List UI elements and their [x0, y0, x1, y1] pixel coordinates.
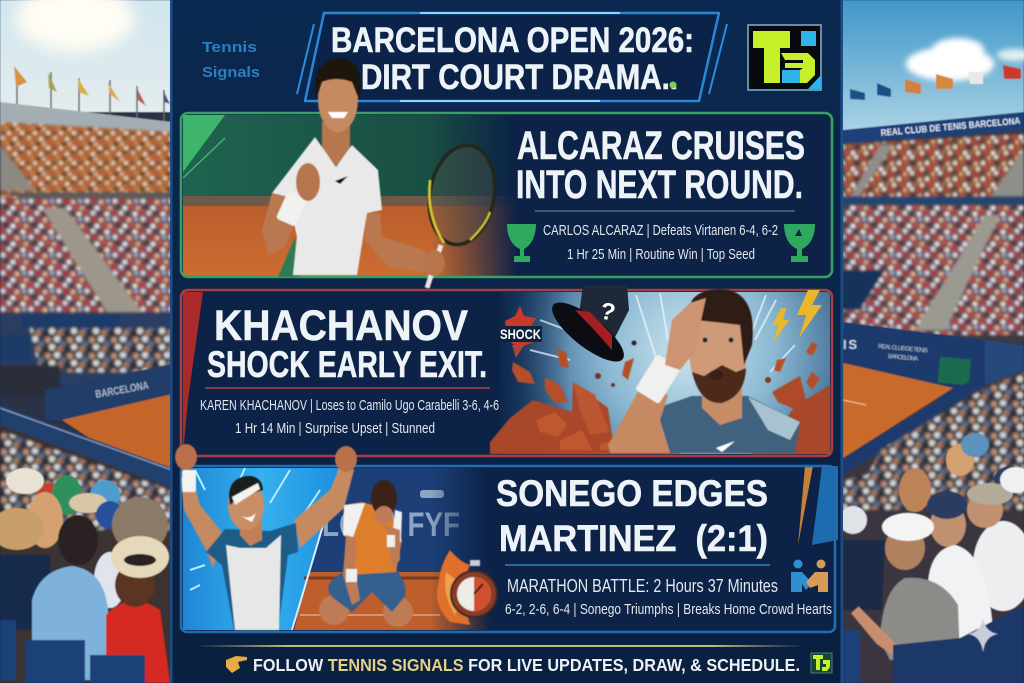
icon: trophy left	[507, 224, 536, 262]
stats line 2: 1 Hr 14 Min | Surprise Upset | Stunned	[235, 420, 435, 437]
title line 2: DIRT COURT DRAMA..	[361, 58, 678, 97]
left lower crowd	[0, 425, 172, 683]
icon: pointing hand	[226, 656, 247, 673]
right court board	[843, 322, 1024, 400]
panel: left stadium photo	[0, 0, 172, 683]
stats line 2: 1 Hr 25 Min | Routine Win | Top Seed	[567, 246, 755, 263]
icon: falling top hat	[544, 285, 632, 371]
icon: trophy right	[784, 224, 815, 262]
shock backdrop	[490, 292, 830, 454]
left Barcelona banner: BARCELONA	[94, 380, 150, 401]
stats line 2: 6-2, 2-6, 6-4 | Sonego Triumphs | Breaks Home Crowd Hearts	[505, 601, 832, 618]
divider: footer rule	[195, 645, 805, 647]
headline: SONEGO EDGES	[496, 473, 768, 514]
headline: ALCARAZ CRUISES	[517, 124, 805, 168]
panel: Sonego	[175, 444, 838, 632]
icon: handshake	[791, 560, 828, 592]
icon: racket	[422, 140, 502, 288]
logo small	[811, 653, 832, 673]
panel: central column	[170, 0, 843, 683]
rubble	[490, 340, 830, 454]
panel: Alcaraz	[181, 113, 832, 277]
headline: KHACHANOV	[214, 302, 468, 350]
headline line 2: MARTINEZ (2:1)	[499, 518, 768, 559]
left Barcelona banner	[45, 364, 172, 420]
illustration: stopwatch with flames	[437, 550, 497, 625]
headline line 2: SHOCK EARLY EXIT.	[207, 344, 487, 385]
left sky	[0, 0, 172, 112]
left flags	[14, 66, 170, 122]
title line 1: BARCELONA OPEN 2026:	[331, 21, 694, 60]
stats line 1: CARLOS ALCARAZ | Defeats Virtanen 6-4, 6-2	[543, 222, 778, 239]
panel: Khachanov	[181, 285, 832, 456]
headline line 2: INTO NEXT ROUND.	[516, 163, 803, 207]
icon: lightning bolts	[772, 290, 822, 343]
left clay court	[62, 394, 172, 468]
right flags	[850, 65, 1021, 100]
stats line 1: MARATHON BATTLE: 2 Hours 37 Minutes	[507, 576, 778, 596]
illustration: Sonego celebrating	[175, 444, 357, 630]
right blue seats	[893, 605, 1024, 683]
sticker: shock	[499, 306, 542, 358]
left upper crowd	[0, 122, 172, 204]
footer	[226, 653, 832, 675]
cloud	[906, 38, 1024, 81]
match backdrop: LCOA FYF	[322, 506, 460, 544]
sparkle watermark	[968, 618, 998, 652]
brand name	[202, 40, 260, 81]
illustration: kneeling player	[319, 480, 413, 627]
follow text: FOLLOW TENNIS SIGNALS FOR LIVE UPDATES, DRAW, & SCHEDULE.	[253, 655, 800, 675]
title banner	[297, 13, 727, 101]
right lower crowd	[839, 370, 1024, 683]
illustration: Khachanov	[608, 289, 800, 453]
right court board: IS	[843, 337, 857, 352]
right court board: REAL CLUB DE TENIS	[878, 344, 928, 354]
illustration: Alcaraz with racket	[262, 58, 502, 288]
right middle crowd	[843, 205, 1024, 335]
right stadium sign	[843, 112, 1024, 144]
right upper crowd	[843, 134, 1024, 208]
court backdrop	[183, 114, 518, 276]
brand name: Tennis	[202, 40, 257, 56]
logo: TS	[748, 25, 821, 90]
sticker: shock: SHOCK	[500, 326, 541, 342]
left blue seats	[0, 620, 145, 683]
icon: falling top hat: ?	[598, 297, 618, 327]
right sky	[842, 0, 1024, 130]
left middle crowd	[0, 198, 172, 395]
right court board: BARCELONA	[888, 354, 918, 363]
right clay court	[843, 363, 953, 458]
panel: right stadium photo	[839, 0, 1024, 683]
green dot	[670, 82, 676, 88]
brand name: Signals	[202, 65, 260, 81]
match backdrop	[183, 467, 491, 631]
stats line 1: KAREN KHACHANOV | Loses to Camilo Ugo Carabelli 3-6, 4-6	[200, 397, 499, 414]
